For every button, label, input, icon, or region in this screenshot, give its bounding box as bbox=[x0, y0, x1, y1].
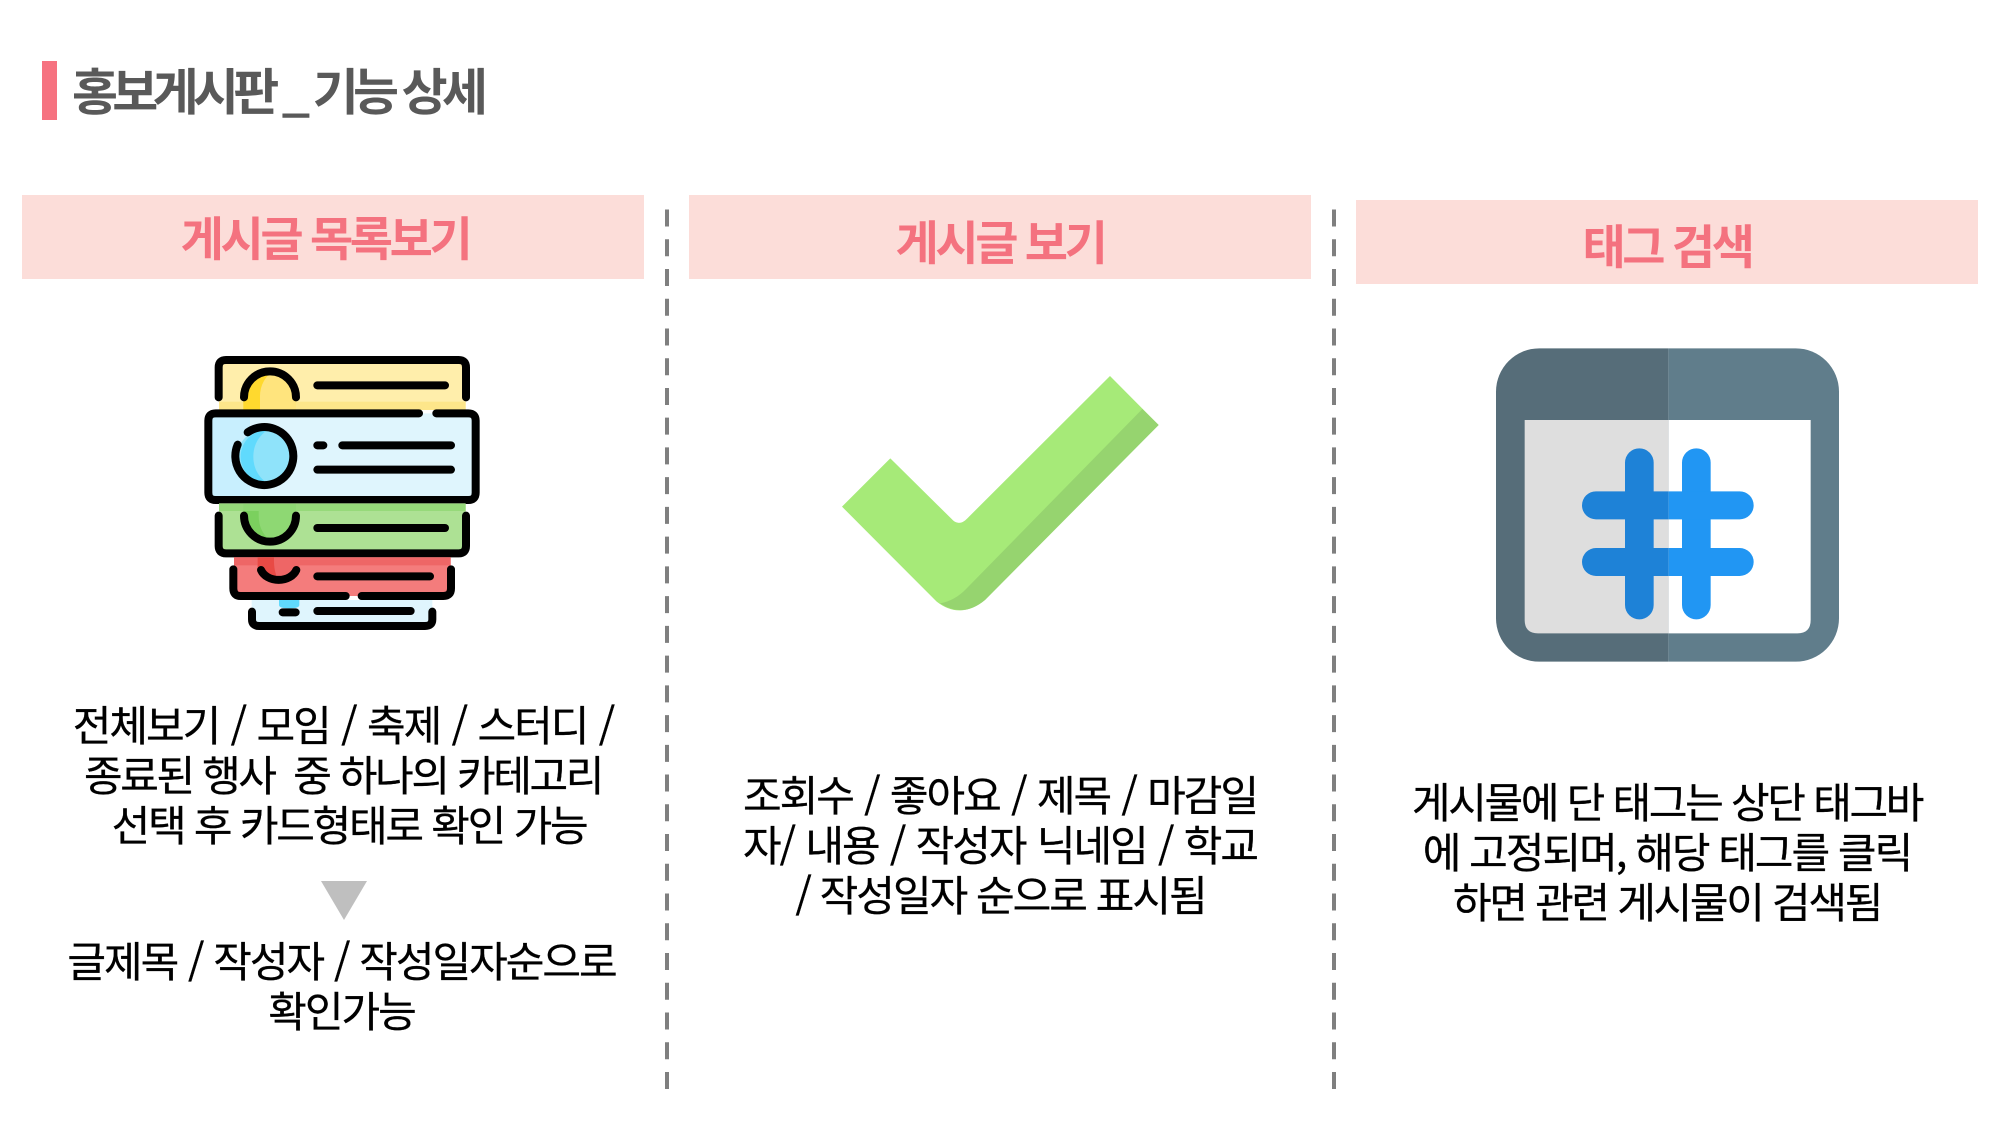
red card bbox=[233, 557, 451, 596]
yellow card bbox=[219, 360, 466, 410]
text: list columns description: 글제목 / 작성자 / 작성일자순으로 bbox=[67, 929, 616, 990]
panel: list view bbox=[22, 195, 644, 1040]
arrow: down triangle bbox=[321, 881, 367, 920]
text: list view description: 전체보기 / 모임 / 축제 / 스터디 / bbox=[73, 693, 613, 754]
heading: list view bbox=[22, 195, 644, 279]
text: tag search description: 게시물에 단 태그는 상단 태그바 bbox=[1412, 770, 1922, 831]
icon: hashtag window bbox=[1496, 348, 1839, 662]
divider: left dashed line bbox=[665, 210, 669, 1089]
text: post view description bbox=[743, 763, 1257, 924]
heading: tag search: 태그 검색 bbox=[1582, 209, 1752, 278]
text: list view description: 종료된 행사 중 하나의 카테고리 bbox=[84, 743, 602, 804]
panel: post view bbox=[689, 195, 1311, 924]
icon: stacked cards bbox=[204, 356, 480, 630]
heading: tag search bbox=[1356, 200, 1978, 284]
text: list columns description bbox=[67, 929, 616, 1040]
divider: right dashed line bbox=[1332, 210, 1336, 1089]
text: tag search description: 에 고정되며, 해당 태그를 클릭 bbox=[1423, 820, 1911, 881]
title: 홍보게시판 _ 기능 상세 bbox=[72, 53, 482, 125]
heading: post view bbox=[689, 195, 1311, 279]
text: post view description: 조회수 / 좋아요 / 제목 / 마감일 bbox=[743, 763, 1257, 824]
panel: tag search bbox=[1356, 200, 1978, 931]
text: tag search description: 하면 관련 게시물이 검색됨 bbox=[1453, 870, 1881, 931]
green card bbox=[219, 503, 466, 553]
heading: list view: 게시글 목록보기 bbox=[181, 201, 469, 270]
text: list columns description: 확인가능 bbox=[268, 979, 415, 1040]
text: post view description: 자/ 내용 / 작성자 닉네임 / 학교 bbox=[743, 813, 1257, 874]
text: list view description bbox=[73, 693, 615, 854]
heading: post view: 게시글 보기 bbox=[896, 205, 1104, 274]
text: tag search description bbox=[1412, 770, 1924, 931]
text: list view description: 선택 후 카드형태로 확인 가능 bbox=[112, 793, 586, 854]
text: post view description: / 작성일자 순으로 표시됨 bbox=[795, 863, 1206, 924]
title accent bar bbox=[42, 61, 57, 120]
blue card bbox=[208, 413, 476, 500]
light blue card bbox=[252, 600, 432, 626]
icon: check mark bbox=[842, 376, 1159, 610]
